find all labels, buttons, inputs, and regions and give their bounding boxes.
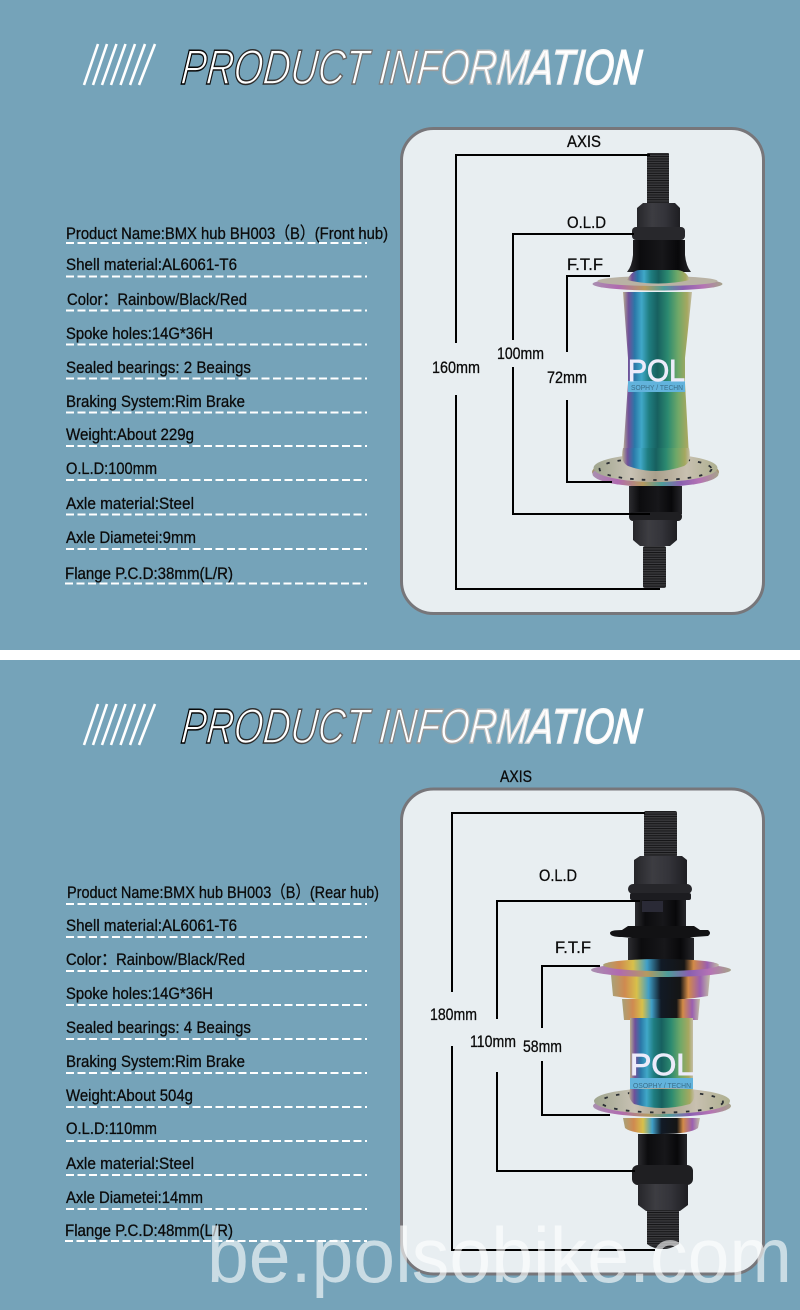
- rear hub illustration: POL: [630, 1047, 694, 1082]
- white divider band: [0, 650, 800, 660]
- specification list: Axle material:Steel: [66, 1154, 194, 1173]
- dimension: F.T.F: F.T.F: [567, 255, 603, 274]
- dimension: axis: AXIS: [567, 132, 601, 151]
- specification list: Weight:About 504g: [66, 1086, 193, 1105]
- specification list: Braking System:Rim Brake: [66, 392, 245, 411]
- specification list: Sealed bearings: 2 Beaings: [66, 358, 251, 377]
- dimension: F.T.F: F.T.F: [555, 938, 591, 957]
- diagram panel: [402, 789, 764, 1274]
- specification list: Color：Rainbow/Black/Red: [66, 950, 245, 969]
- specification list: Spoke holes:14G*36H: [66, 324, 213, 343]
- specification list: Shell material:AL6061-T6: [66, 255, 237, 274]
- specification list: Flange P.C.D:38mm(L/R): [65, 564, 233, 583]
- specification list: Braking System:Rim Brake: [66, 1052, 245, 1071]
- specification list: Axle Diametei:14mm: [66, 1188, 203, 1207]
- dimension: O.L.D: [497, 213, 650, 514]
- specification list: Flange P.C.D:48mm(L/R): [65, 1221, 233, 1240]
- section: front hub: [65, 41, 764, 614]
- dimension: F.T.F: [547, 255, 612, 482]
- dimension: O.L.D: 100mm: [497, 344, 544, 363]
- specification list: O.L.D:110mm: [66, 1119, 157, 1138]
- specification list: Product Name:BMX hub BH003（B）(Front hub): [66, 224, 388, 243]
- dimension: axis: [430, 767, 655, 1250]
- front hub illustration: POL: [628, 353, 685, 388]
- specification list: Product Name:BMX hub BH003（B）(Rear hub): [67, 883, 379, 902]
- watermark: be.polsobike.com: [207, 1211, 792, 1299]
- dimension: axis: [432, 132, 660, 589]
- specification list: Color：Rainbow/Black/Red: [67, 290, 247, 309]
- dimension: O.L.D: O.L.D: [539, 866, 577, 885]
- dimension: axis: 160mm: [432, 358, 480, 377]
- title stripes: [84, 704, 155, 745]
- dimension: F.T.F: 72mm: [547, 368, 587, 387]
- title stripes: [84, 44, 155, 85]
- specification list: O.L.D:100mm: [66, 459, 157, 478]
- specification list: Axle material:Steel: [66, 494, 194, 513]
- rear hub illustration: [591, 811, 731, 1249]
- specification list: Spoke holes:14G*36H: [66, 984, 213, 1003]
- specification list: [65, 883, 379, 1241]
- dimension: axis: AXIS: [500, 767, 532, 786]
- dimension: O.L.D: [470, 866, 640, 1171]
- dimension: O.L.D: 110mm: [470, 1032, 516, 1051]
- section: rear hub: [65, 700, 764, 1274]
- specification list: Axle Diametei:9mm: [66, 528, 196, 547]
- specification list: Weight:About 229g: [66, 425, 194, 444]
- title: PRODUCT INFORMATION: [179, 41, 644, 95]
- dimension: F.T.F: [523, 938, 610, 1115]
- front hub illustration: SOPHY / TECHN: [631, 385, 683, 392]
- specification list: Sealed bearings: 4 Beaings: [66, 1018, 251, 1037]
- title: PRODUCT INFORMATION: [179, 700, 644, 754]
- specification list: Shell material:AL6061-T6: [66, 916, 237, 935]
- front hub illustration: [592, 153, 722, 588]
- dimension: axis: 180mm: [430, 1005, 477, 1024]
- specification list: [65, 224, 388, 584]
- rear hub illustration: OSOPHY / TECHN: [633, 1081, 691, 1090]
- dimension: O.L.D: O.L.D: [567, 213, 606, 232]
- diagram panel: [402, 128, 764, 614]
- dimension: F.T.F: 58mm: [523, 1037, 562, 1056]
